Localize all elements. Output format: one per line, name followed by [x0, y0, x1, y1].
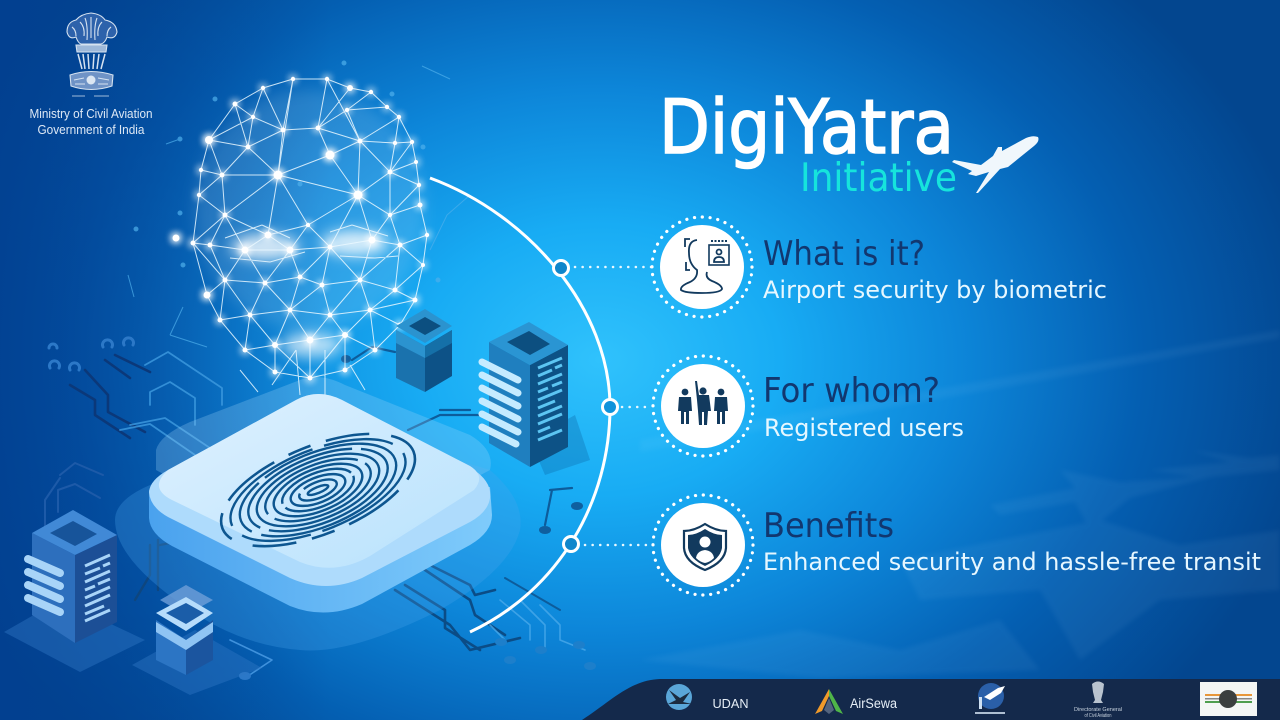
- icon: face id: [681, 239, 729, 293]
- chip top face: [159, 394, 479, 568]
- circuit pads: [239, 355, 596, 680]
- section: what is it: [652, 217, 1107, 317]
- ministry text: [30, 107, 153, 137]
- subtitle: Initiative: Initiative: [800, 156, 957, 201]
- ministry text: Government of India: [38, 123, 145, 137]
- server stripes: [482, 362, 518, 444]
- server stripes: [28, 559, 60, 612]
- description: Airport security by biometric: [763, 276, 1107, 304]
- icon ring: [653, 356, 753, 456]
- server vent pattern: [85, 555, 110, 621]
- server: bottom left tall: [28, 510, 117, 643]
- ministry text: Ministry of Civil Aviation: [30, 107, 153, 121]
- emblem columns: [78, 54, 105, 69]
- heading: For whom?: [763, 371, 940, 411]
- footer logo: DGCA: Directorate General: [1074, 707, 1122, 713]
- footer logo: BCAS badge: [1200, 682, 1257, 716]
- server vent pattern: [538, 358, 562, 440]
- big connector arc: [430, 178, 610, 632]
- stray constellation nodes: [128, 61, 470, 347]
- section: benefits: [653, 495, 1261, 595]
- dotted connectors: [575, 267, 652, 545]
- connector node: for whom: [602, 400, 618, 414]
- emblem abacus: [76, 45, 107, 52]
- connector node: benefits: [564, 536, 578, 552]
- emblem base: [70, 72, 113, 90]
- icon: airplane: [952, 136, 1038, 193]
- main fingerprint chip: [149, 394, 492, 613]
- section: for whom: [653, 356, 964, 456]
- icon ring: [652, 217, 752, 317]
- heading: Benefits: [763, 506, 894, 546]
- chip side: [149, 487, 492, 613]
- footer logo: AirSewa: [815, 689, 897, 714]
- mesh lines: [193, 79, 427, 395]
- connector node: what is it: [554, 260, 568, 276]
- server: bottom small: [156, 585, 213, 675]
- mesh glow: [195, 90, 425, 357]
- panel: translucent base plates: [4, 377, 590, 695]
- footer logo: UDAN: [666, 684, 748, 711]
- footer logo: airport authority: [975, 683, 1005, 714]
- icon: fingerprint: [206, 411, 430, 569]
- icon disc: [661, 364, 745, 448]
- faint aircraft background: [640, 330, 1280, 678]
- icon ring: [653, 495, 753, 595]
- mesh nodes: [172, 77, 429, 381]
- description: Enhanced security and hassle-free transit: [763, 548, 1261, 576]
- footer logo: DGCA: of Civil Aviation: [1084, 713, 1112, 719]
- ministry emblem: [67, 13, 117, 96]
- heading: What is it?: [763, 234, 925, 274]
- footer logo: AirSewa: AirSewa: [850, 696, 897, 711]
- description: Registered users: [764, 414, 964, 442]
- face mesh: [128, 61, 470, 395]
- footer logo: UDAN: UDAN: [712, 696, 748, 711]
- footer bar: [582, 679, 1280, 720]
- emblem lions: [67, 13, 117, 44]
- icon disc: [660, 225, 744, 309]
- icon: people: [678, 381, 728, 425]
- server: top small: [396, 309, 452, 392]
- icon disc: [661, 503, 745, 587]
- icon: shield: [684, 524, 726, 570]
- footer logo: DGCA: [1074, 682, 1122, 719]
- background left shade: [0, 0, 330, 720]
- title: DigiYatra: DigiYatra: [659, 83, 954, 171]
- server: top right tall: [482, 322, 568, 467]
- circuit traces: [45, 338, 585, 678]
- chip light rim: [149, 394, 490, 586]
